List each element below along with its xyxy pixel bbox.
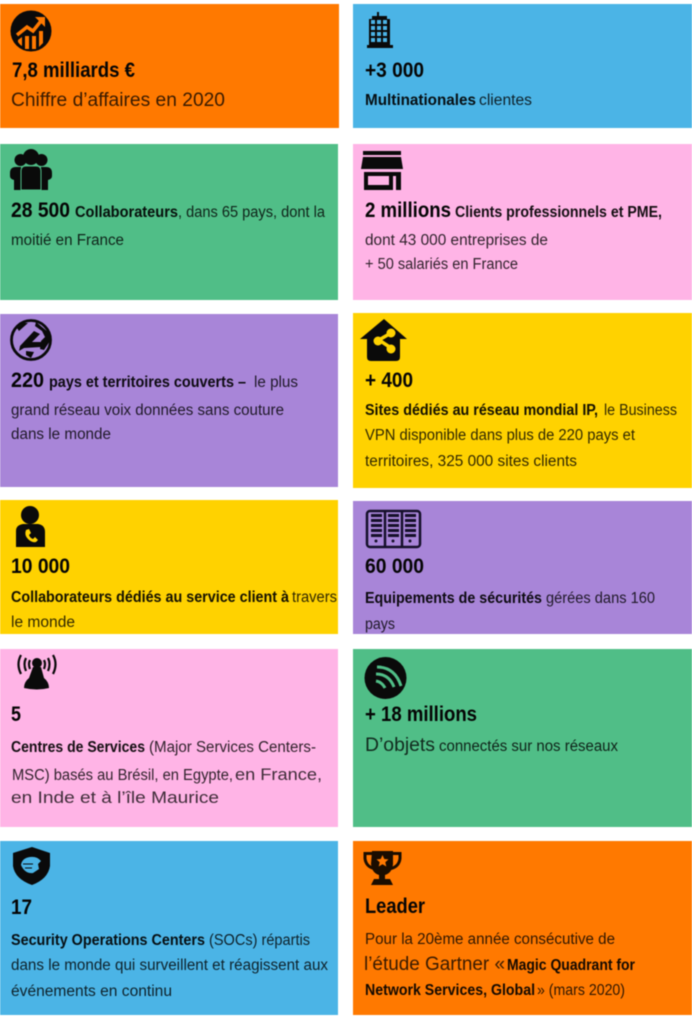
heading: 10 000: 10 000	[11, 555, 70, 578]
text: centres de services: en France,	[235, 765, 322, 784]
panel: collaborateurs	[0, 144, 338, 300]
panel: chiffre d'affaires	[0, 4, 339, 128]
heading: 5: 5	[11, 703, 21, 726]
text: sites dédiés: Sites dédiés au réseau mondial IP,	[365, 402, 598, 419]
heading: + 18 millions: + 18 millions	[365, 703, 477, 726]
text: chiffre d'affaires: Chiffre d’affaires en 2020	[11, 90, 225, 111]
icon: house with network	[360, 319, 407, 361]
text: 2 millions clients: + 50 salariés en France	[365, 256, 518, 273]
panel: centres de services	[0, 649, 338, 827]
text: 220 pays et territoires: le plus	[254, 374, 298, 391]
text: collaborateurs service client	[11, 589, 337, 631]
heading: 7,8 milliards: 7,8 milliards €	[12, 59, 135, 82]
text: 220 pays et territoires: grand réseau voix données sans couture	[11, 402, 284, 419]
text: étude gartner: Network Services, Global	[365, 982, 535, 999]
text: security operations centers: dans le monde qui surveillent et réagissent aux	[11, 957, 328, 974]
text: multinationales clientes: clientes	[479, 92, 532, 109]
text: security operations centers: événements en continu	[11, 983, 172, 1000]
text: security operations centers: Security Operations Centers	[11, 932, 205, 949]
text: 220 pays et territoires: pays et territoires couverts –	[49, 374, 246, 391]
heading: 60 000: 60 000	[365, 555, 424, 578]
icon: signal in circle	[364, 657, 406, 699]
panel: security operations centers	[0, 841, 338, 1015]
panel: multinationales	[353, 4, 692, 128]
text: 220 pays et territoires: 220	[11, 369, 44, 392]
text: sites dédiés: VPN disponible dans plus de 220 pays et	[365, 427, 636, 444]
text: 2 millions clients	[365, 199, 662, 273]
text: sites dédiés: territoires, 325 000 sites clients	[365, 453, 577, 470]
text: 2 millions clients: dont 43 000 entreprises de	[365, 232, 548, 249]
panel: leader gartner	[353, 841, 692, 1015]
text: centres de services	[11, 739, 322, 807]
text: 28 500 collaborateurs: , dans 65 pays, dont la	[178, 204, 325, 221]
text: centres de services: MSC) basés au Brésil, en Egypte,	[12, 767, 233, 784]
text: 28 500 collaborateurs: 28 500	[11, 199, 70, 222]
text: centres de services: (Major Services Centers-	[149, 739, 316, 756]
panel: objets connectés	[353, 649, 692, 827]
text: 2 millions clients: 2 millions	[365, 199, 451, 222]
text: security operations centers	[11, 932, 328, 1000]
text: objets connectés	[365, 735, 618, 756]
icon: globe	[12, 320, 50, 360]
text: security operations centers: (SOCs) répartis	[209, 932, 310, 949]
icon: storefront	[361, 151, 403, 190]
text: 28 500 collaborateurs: Collaborateurs	[75, 204, 178, 221]
icon: trophy	[365, 851, 400, 885]
text: 220 pays et territoires: dans le monde	[11, 426, 111, 443]
text: centres de services: en Inde et à l’île Maurice	[11, 788, 219, 807]
panel: équipements de sécurité	[353, 501, 692, 634]
text: 28 500 collaborateurs	[11, 199, 325, 249]
heading: +3 000: +3 000	[365, 59, 424, 82]
text: étude gartner: Pour la 20ème année consécutive de	[365, 931, 615, 948]
icon: growth chart in circle	[10, 10, 52, 52]
text: sites dédiés: le Business	[604, 402, 677, 419]
icon: office building	[367, 12, 393, 48]
icon: group of people	[10, 149, 52, 190]
heading: 17: 17	[11, 896, 32, 919]
icon: person with phone	[16, 506, 45, 547]
text: équipements de sécurités: pays	[365, 616, 395, 633]
heading: + 400: + 400	[365, 369, 413, 392]
text: 2 millions clients: Clients professionnels et PME,	[455, 204, 662, 221]
panel: service client	[0, 500, 338, 634]
text: équipements de sécurités: gérées dans 160	[546, 590, 655, 607]
text: objets connectés: connectés sur nos réseaux	[439, 738, 618, 755]
text: collaborateurs service client: le monde	[11, 614, 75, 631]
text: sites dédiés	[365, 402, 677, 470]
panel: clients professionnels	[353, 144, 692, 300]
text: étude gartner: » (mars 2020)	[537, 982, 625, 999]
icon: server racks	[367, 510, 420, 548]
icon: shield	[13, 847, 50, 885]
text: étude gartner	[364, 931, 635, 999]
text: collaborateurs service client: travers	[292, 589, 337, 606]
text: multinationales clientes	[365, 92, 532, 109]
text: 28 500 collaborateurs: moitié en France	[11, 232, 124, 249]
panel: pays et territoires	[0, 314, 338, 487]
panel: sites réseau mondial	[353, 313, 692, 488]
text: centres de services: Centres de Services	[11, 739, 145, 756]
text: équipements de sécurités: Equipements de sécurités	[365, 590, 542, 607]
text: étude gartner: l’étude Gartner «	[364, 954, 505, 975]
text: 220 pays et territoires	[11, 369, 298, 443]
heading: leader: Leader	[365, 895, 425, 918]
text: multinationales clientes: Multinationales	[365, 92, 476, 109]
text: équipements de sécurités	[365, 590, 655, 633]
text: étude gartner: Magic Quadrant for	[507, 957, 635, 974]
text: collaborateurs service client: Collaborateurs dédiés au service client à	[11, 589, 289, 606]
text: objets connectés: D’objets	[365, 735, 435, 756]
icon: antenna	[18, 655, 56, 690]
